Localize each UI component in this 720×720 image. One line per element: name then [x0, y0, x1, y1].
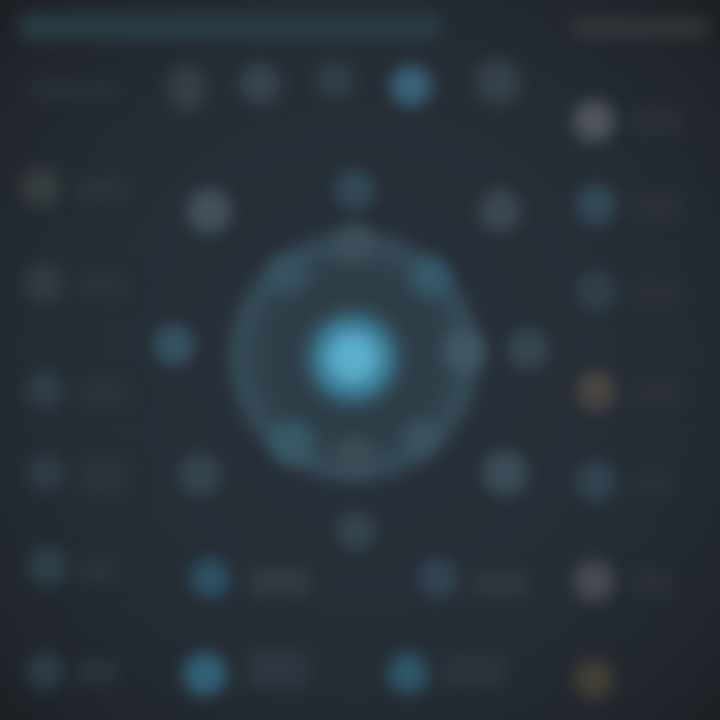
central ring diagram — [230, 224, 486, 481]
top right label — [572, 19, 708, 37]
left column icons — [21, 167, 68, 690]
inner ring dark patches — [282, 285, 426, 429]
right column icons — [573, 100, 617, 699]
core glow — [309, 314, 397, 402]
lower center items — [183, 557, 527, 696]
outer ring — [242, 245, 466, 469]
satellites around ring — [153, 169, 549, 551]
ring nodes — [268, 224, 486, 475]
left column text — [78, 178, 128, 684]
ring glow — [230, 233, 478, 481]
top icon row — [30, 59, 521, 112]
title bar — [20, 14, 440, 40]
right column text — [632, 108, 682, 596]
core — [322, 327, 384, 389]
